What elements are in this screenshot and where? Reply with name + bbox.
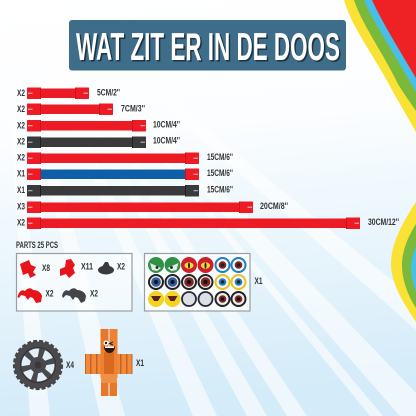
part: red arc x2: X2: [46, 288, 54, 300]
row: 10 cm red x2: X2: [17, 120, 25, 132]
icon: wheel: [14, 341, 62, 389]
row: 15 cm blue x1: [17, 168, 233, 180]
part: red corner x11: X11: [81, 262, 94, 272]
eyes: green: [148, 257, 180, 273]
row: 15 cm black x1: X1: [17, 185, 25, 196]
row: 20 cm red x3: X3: [17, 202, 25, 212]
row: 15 cm blue x1: 15CM/6'': [207, 168, 233, 179]
length list: connector bars: [17, 88, 399, 229]
row: 20 cm red x3: 20CM/8'': [260, 201, 288, 212]
rainbow swoosh: top right: [344, 0, 416, 132]
eye stickers quantity: X1: [254, 276, 263, 287]
row: 30 cm red x2: [17, 217, 399, 229]
eyes: dark ring red: [182, 275, 212, 289]
eyes: dark ring blue: [149, 275, 180, 289]
panel: eye stickers: [144, 254, 250, 311]
part: black arc x2: X2: [90, 288, 98, 300]
row: 10 cm red x2: 10CM/4'': [153, 120, 180, 130]
eyes: dark ring brown: [216, 292, 246, 306]
row: 30 cm red x2: 30CM/12'': [368, 217, 399, 228]
row: 5 cm red x2: 5CM/2'': [97, 88, 120, 98]
row: 7 cm red x2: 7CM/3'': [121, 104, 145, 114]
row: 15 cm red x2: X2: [17, 152, 25, 164]
rainbow swoosh: right edge: [391, 202, 416, 322]
title banner: [69, 20, 346, 70]
row: 5 cm red x2: [17, 88, 120, 99]
row: 15 cm black x1: 15CM/6'': [207, 184, 233, 196]
figure quantity: X1: [136, 358, 144, 369]
row: 10 cm black x2: 10CM/4'': [153, 136, 180, 146]
eyes: silver: [182, 292, 212, 306]
row: 10 cm red x2: [17, 120, 180, 132]
part: red block x8: X8: [42, 263, 50, 274]
eyes: red and yellow: [181, 257, 214, 273]
wheel quantity: X4: [66, 360, 74, 371]
row: 15 cm blue x1: X1: [17, 168, 25, 180]
row: 7 cm red x2: [17, 104, 145, 115]
eyes: yellow ring: [216, 275, 246, 289]
row: 20 cm red x3: [17, 201, 288, 213]
parts heading: PARTS 25 PCS: [16, 240, 58, 251]
row: 5 cm red x2: X2: [17, 88, 25, 99]
row: 10 cm black x2: [17, 136, 180, 148]
eyes: yellow faces: [148, 291, 180, 307]
icon: orange figure: [85, 329, 132, 396]
row: 10 cm black x2: X2: [17, 136, 25, 148]
row: 15 cm red x2: [17, 152, 233, 164]
row: 15 cm black x1: [17, 184, 233, 196]
row: 7 cm red x2: X2: [17, 104, 25, 115]
row: 15 cm red x2: 15CM/6'': [207, 152, 233, 163]
panel: parts: [16, 254, 132, 311]
part: black disc x2: X2: [117, 262, 125, 272]
eyes: blue ring: [216, 258, 246, 272]
row: 30 cm red x2: X2: [17, 218, 25, 228]
